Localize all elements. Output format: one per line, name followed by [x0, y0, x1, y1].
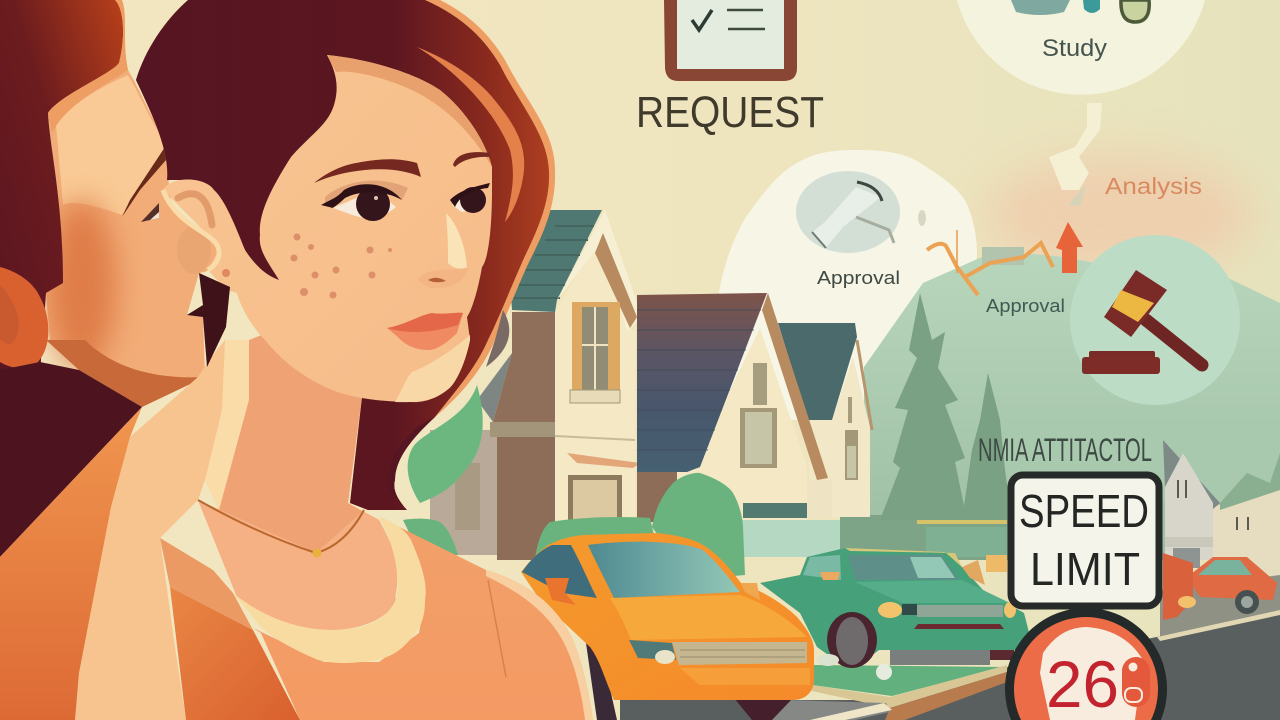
- car: red: [1163, 553, 1277, 620]
- panel: gavel circle: [1070, 235, 1240, 405]
- heading: request: REQUEST: [636, 88, 824, 137]
- back hair: [0, 0, 123, 400]
- distant house right: [1163, 440, 1280, 590]
- icon: study objects: [1011, 0, 1149, 22]
- brows: [314, 159, 421, 183]
- back nose tip: [177, 226, 211, 274]
- back cheek shadow: [48, 200, 116, 370]
- chart: rising line and arrow: [927, 222, 1083, 295]
- gray curl behind: [486, 310, 509, 367]
- jaw highlight: [395, 335, 470, 402]
- sign: speed limit: [1011, 475, 1159, 606]
- icon: megaphone: [796, 171, 926, 253]
- chest: [198, 500, 397, 630]
- left house windows: [572, 302, 620, 390]
- shoulder rim: [486, 570, 593, 720]
- back ear: [0, 267, 48, 368]
- neckline: [233, 517, 426, 663]
- hair streak: [417, 47, 524, 222]
- freckles: [290, 234, 392, 298]
- nose: [446, 213, 467, 269]
- right torso: [253, 517, 593, 720]
- back neck shadow: [46, 340, 205, 407]
- cream profile edge: [163, 190, 219, 270]
- peach haze: [985, 155, 1255, 275]
- tree: short: [962, 373, 1012, 520]
- left house roof: [510, 210, 602, 312]
- hedges and bushes: [403, 473, 745, 590]
- left shoulder: [0, 407, 142, 720]
- eye shadow: [325, 181, 408, 205]
- road: [620, 612, 1280, 720]
- grass and curb: [770, 610, 1280, 720]
- house: small back: [778, 323, 872, 517]
- ear detail: [178, 194, 212, 225]
- lips: [387, 313, 463, 350]
- panel: study circle: [957, 0, 1205, 95]
- connector: study to analysis: [1049, 103, 1102, 190]
- band of greenery behind cars: [840, 515, 1015, 560]
- right hill haze: [1000, 420, 1280, 510]
- car: green: [760, 548, 1031, 680]
- hair behind face: [136, 0, 555, 510]
- sidewalk right: [1160, 575, 1280, 637]
- back hair rim: [48, 0, 128, 133]
- panel: approval blob: [719, 150, 977, 420]
- label: study: Study: [1042, 35, 1107, 62]
- left house gable trim: [557, 210, 642, 332]
- panel: request clipboard: [664, 0, 797, 81]
- person: back figure: [0, 0, 220, 557]
- sign: speed circle: [1005, 608, 1167, 720]
- icon: gavel: [1082, 270, 1202, 374]
- label: sign caption: NMIA ATTITACTOL: [978, 432, 1152, 468]
- far car: [917, 520, 1007, 572]
- sign text: limit: LIMIT: [1030, 543, 1140, 595]
- dark gap: [187, 273, 230, 367]
- back eye: [122, 147, 166, 217]
- eyes: [333, 190, 396, 218]
- house: left: [430, 210, 642, 560]
- icon: checkmark: [692, 10, 712, 30]
- cream stripe: [205, 340, 249, 510]
- centre medium orange: [160, 538, 253, 630]
- back face and neck: [46, 63, 220, 407]
- trees: [880, 293, 1012, 520]
- tree: tall: [880, 293, 967, 520]
- forehead shadow: [327, 55, 492, 167]
- hair strand over leaf: [388, 417, 435, 510]
- house: centre: [637, 293, 840, 557]
- front face: [163, 55, 492, 402]
- necklace: [198, 500, 364, 553]
- number: 26: 26: [1046, 647, 1119, 720]
- label: analysis: Analysis: [1105, 173, 1202, 199]
- sign text: speed: SPEED: [1019, 485, 1149, 537]
- person: front figure: [0, 0, 593, 720]
- leaf tree in front of wall: [408, 385, 483, 503]
- mountains: [864, 254, 1280, 560]
- cream band: [75, 340, 249, 720]
- car: orange: [521, 533, 814, 720]
- centre dark orange: [170, 587, 300, 720]
- label: approval left: Approval: [817, 268, 900, 288]
- neck: [198, 320, 400, 630]
- back nape: [0, 362, 142, 557]
- back forehead highlight: [56, 75, 165, 215]
- strap line: [488, 580, 506, 677]
- label: approval right: Approval: [986, 296, 1065, 316]
